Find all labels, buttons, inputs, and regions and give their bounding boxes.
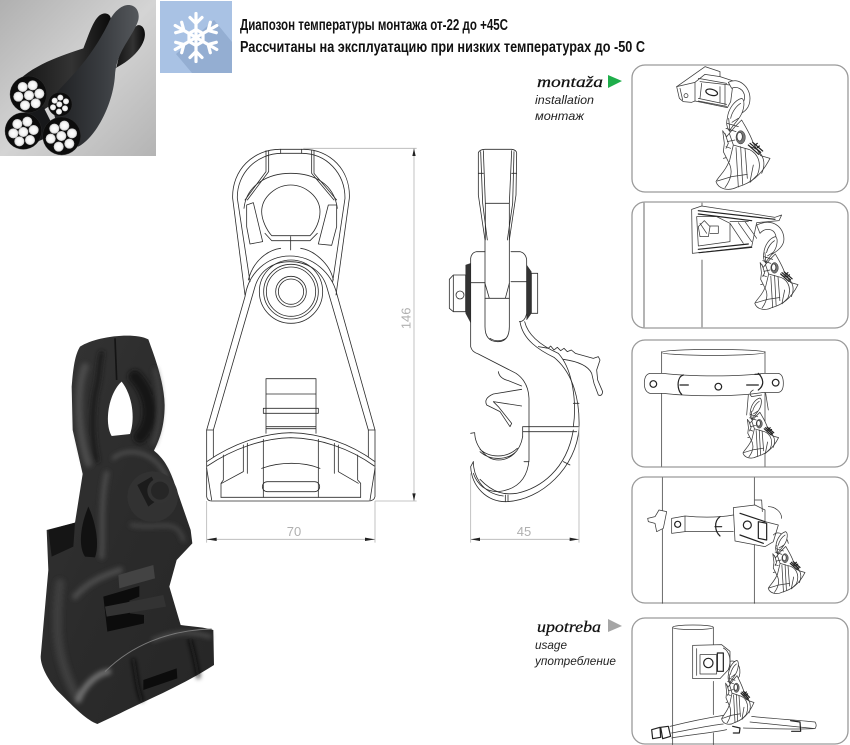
dimension: depth 45 [471,427,579,543]
panel: installation step 1 [632,65,848,192]
head [478,149,517,342]
hole in loop [108,382,133,436]
ratchet [538,346,603,395]
slot [81,507,97,557]
label: upotreba: usage [535,638,567,652]
dimension: width 70 [207,501,375,543]
dimension: height 146 [303,148,417,501]
label: montaža [535,74,622,123]
snowflake [172,14,220,62]
heading: temperature text [240,17,645,56]
dimension: height 146: 146 [399,307,414,329]
heading: temperature text: Диапозон температуры монтажа от-22 до +45С [240,17,508,34]
illustration: clamp holding cables on pole [652,625,816,745]
block [263,379,318,433]
bolt and nut [127,471,178,522]
cable: rear black conductor [13,5,145,147]
cup [207,433,375,500]
dimension: width 70: 70 [287,524,301,539]
lugs and nut [449,252,538,492]
label: montaža: montaža [537,74,603,91]
label: montaža: installation [535,93,594,107]
panel: usage [632,618,848,745]
icon: grey arrow [608,619,622,632]
icon: snowflake panel [160,1,232,73]
product photo: black clamp [41,336,214,724]
cable ends [5,76,81,155]
illustration: bracket on pole [692,206,798,309]
panel: installation step 4 [632,477,848,603]
cable bundle image [0,0,156,156]
icon: green arrow [608,75,622,88]
dimension: depth 45: 45 [517,524,531,539]
panel: installation step 3 [632,340,848,467]
illustration: band and bracket [648,478,788,603]
panel: installation step 2 [632,202,848,328]
label: upotreba: употребление [534,654,616,668]
heading: temperature text: Рассчитаны на эксплуатацию при низких температурах до -50 С [240,39,645,56]
label: upotreba: upotreba [537,619,601,636]
central openings [48,523,177,690]
illustration: band on pole [644,349,783,466]
label: upotreba [534,619,622,668]
technical drawing: front view [207,148,417,543]
label: montaža: монтаж [535,109,585,123]
body [207,248,375,501]
hook [471,322,579,502]
head loop [233,149,349,295]
technical drawing: side view [449,149,603,543]
illustration: clamp on bracket [677,67,770,189]
